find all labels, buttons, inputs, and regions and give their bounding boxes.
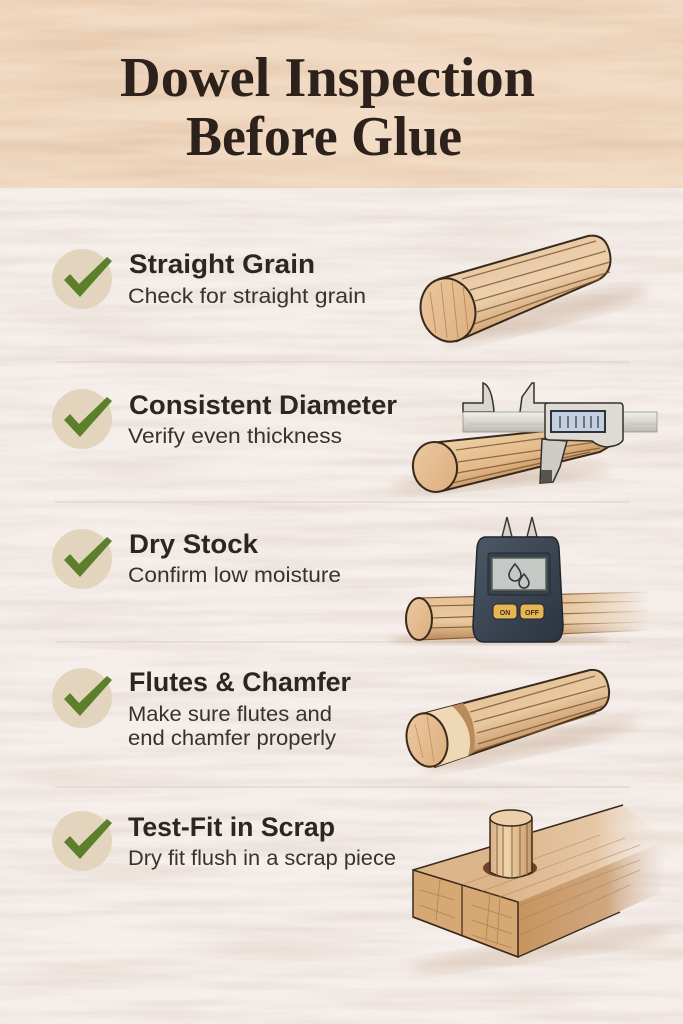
illustration: chamfered dowel [401, 670, 640, 778]
icon: check badge [52, 811, 112, 871]
illustration: dowel with caliper [390, 383, 657, 497]
heading: flutes and chamfer: Flutes & Chamfer [129, 667, 351, 697]
item: flutes and chamfer [52, 667, 640, 778]
heading: consistent diameter: Consistent Diameter [129, 390, 397, 420]
text: test-fit in scrap: Dry fit flush in a scrap piece [128, 846, 396, 870]
caliper [463, 383, 657, 483]
upright dowel [490, 810, 532, 878]
heading: dry stock: Dry Stock [129, 529, 258, 559]
dowel [406, 592, 650, 640]
illustration: scrap block with dowel [410, 805, 670, 978]
moisture meter: ON [500, 610, 510, 617]
illustration: fluted dowel [413, 236, 650, 352]
heading: test-fit in scrap: Test-Fit in Scrap [128, 812, 335, 842]
title [120, 47, 535, 168]
moisture meter: OFF [525, 610, 540, 617]
dowel [410, 431, 620, 495]
text: dry stock: Confirm low moisture [128, 563, 341, 587]
icon: check badge [52, 529, 112, 589]
moisture meter [473, 517, 563, 642]
heading: straight grain: Straight Grain [129, 249, 315, 279]
icon: check badge [52, 668, 112, 728]
item: dry stock [52, 517, 650, 645]
text: consistent diameter: Verify even thickness [128, 424, 342, 448]
text: straight grain: Check for straight grain [128, 284, 366, 308]
illustration: dowel with moisture meter [390, 517, 650, 645]
icon: check badge [52, 249, 112, 309]
block [413, 805, 668, 957]
item: test-fit in scrap [52, 805, 670, 978]
title: Dowel Inspection [120, 47, 535, 109]
icon: check badge [52, 389, 112, 449]
text: flutes and chamfer: Make sure flutes and [128, 702, 332, 726]
title: Before Glue [186, 106, 462, 168]
item: consistent diameter [52, 383, 657, 497]
item: straight grain [52, 236, 650, 352]
text: flutes and chamfer second line: end chamfer properly [128, 726, 336, 750]
header wood panel [0, 0, 683, 188]
